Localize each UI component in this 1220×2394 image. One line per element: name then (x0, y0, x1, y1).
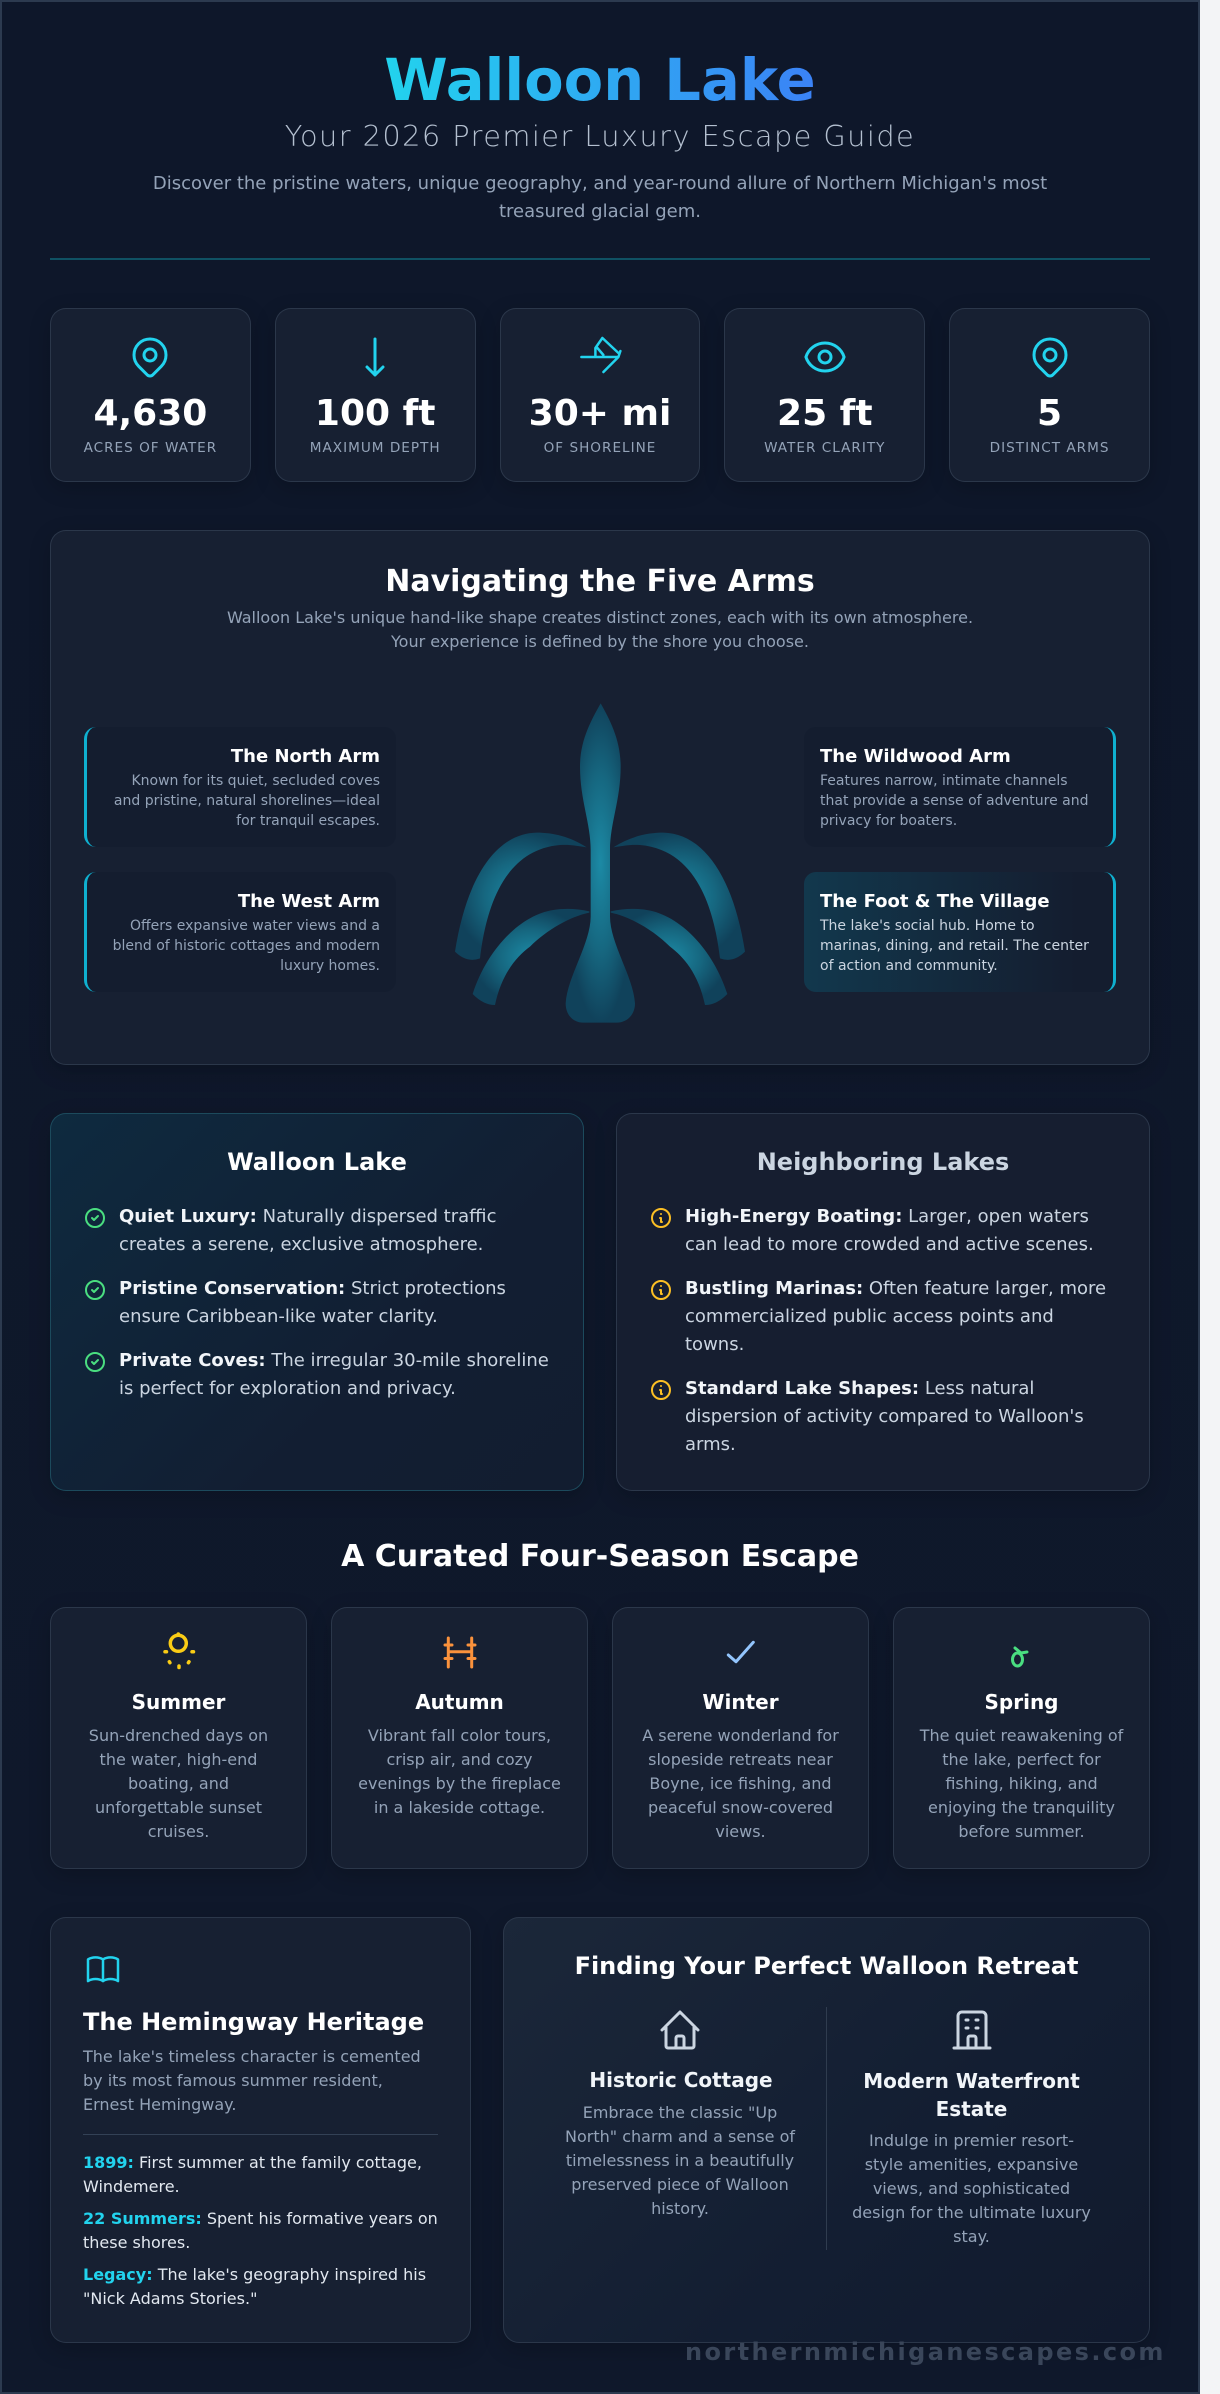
arm: foot and village: The Foot & The Village (820, 891, 1050, 912)
season card: spring: the lake, perfect for (942, 1750, 1101, 1769)
fact: 22 summers: these shores. (83, 2233, 190, 2252)
icon: info (651, 1208, 671, 1228)
arm: foot and village: marinas, dining, and retail. The center (820, 938, 1089, 954)
fact: 1899 (83, 2153, 422, 2196)
arm: wildwood: that provide a sense of adventure and (820, 793, 1088, 809)
option title (863, 2069, 1080, 2121)
stat card: depth (275, 308, 476, 482)
list item: can lead to more crowded and active scenes. (685, 1234, 1094, 1255)
heading: Neighboring Lakes (757, 1148, 1009, 1176)
intro: The lake's timeless character is cemented (83, 2047, 421, 2066)
intro text (153, 173, 1047, 222)
panel: perfect retreat (503, 1917, 1150, 2343)
option text: history. (651, 2199, 709, 2218)
season card: winter: Winter (702, 1690, 779, 1714)
heading: Finding Your Perfect Walloon Retreat (575, 1952, 1078, 1980)
season card: summer (50, 1607, 307, 1869)
icon: info (651, 1380, 671, 1400)
list item (685, 1206, 1094, 1255)
option text: views, and sophisticated (873, 2179, 1070, 2198)
list item (119, 1206, 496, 1255)
fact: legacy: "Nick Adams Stories." (83, 2289, 257, 2308)
option text: stay. (953, 2227, 990, 2246)
option text: Indulge in premier resort- (869, 2131, 1074, 2150)
stat card: arms: DISTINCT ARMS (990, 440, 1109, 456)
stat card: depth: MAXIMUM DEPTH (310, 440, 441, 456)
heading: The Hemingway Heritage (83, 2008, 424, 2036)
option text: design for the ultimate luxury (852, 2203, 1091, 2222)
season card: autumn (331, 1607, 588, 1869)
season card: autumn: crisp air, and cozy (386, 1750, 533, 1769)
icon: info (651, 1280, 671, 1300)
header divider (50, 258, 1150, 260)
list item (685, 1278, 1106, 1355)
subtitle: Your 2026 Premier Luxury Escape Guide (285, 119, 915, 153)
season card: winter: slopeside retreats near (648, 1750, 833, 1769)
intro: by its most famous summer resident, (83, 2071, 383, 2090)
season card: spring: fishing, hiking, and (945, 1774, 1098, 1793)
stat card: clarity: 25 ft (777, 392, 873, 434)
option text: Embrace the classic "Up (583, 2103, 777, 2122)
arm: west: Offers expansive water views and a (130, 918, 380, 934)
list item: is perfect for exploration and privacy. (119, 1378, 456, 1399)
arm: west: blend of historic cottages and modern (113, 938, 380, 954)
season card: winter (612, 1607, 869, 1869)
season card: autumn: in a lakeside cottage. (374, 1798, 545, 1817)
seasons heading: A Curated Four-Season Escape (341, 1539, 859, 1574)
icon: check (85, 1352, 105, 1372)
watermark: northernmichiganescapes.com (685, 2338, 1166, 2366)
arm: north: and pristine, natural shorelines—ideal (114, 793, 380, 809)
season card: autumn: Vibrant fall color tours, (368, 1726, 551, 1745)
fact: 22 summers: 22 Summers: Spent his formative years on (83, 2209, 438, 2228)
list item: creates a serene, exclusive atmosphere. (119, 1234, 483, 1255)
arm: wildwood: Features narrow, intimate channels (820, 773, 1068, 789)
list item: dispersion of activity compared to Walloon's (685, 1406, 1084, 1427)
list item: arms. (685, 1434, 736, 1455)
option text (852, 2131, 1091, 2246)
arm: wildwood: privacy for boaters. (820, 813, 957, 829)
season card: winter: peaceful snow-covered (648, 1798, 833, 1817)
stat card: clarity: WATER CLARITY (764, 440, 885, 456)
season card: winter: A serene wonderland for (642, 1726, 839, 1745)
intro text: Discover the pristine waters, unique geography, and year-round allure of Northern Michigan's most (153, 173, 1047, 194)
season card: spring: before summer. (958, 1822, 1085, 1841)
option title: Estate (936, 2097, 1007, 2121)
panel: Hemingway heritage (50, 1917, 471, 2343)
stat card: shoreline: 30+ mi (529, 392, 671, 434)
season card: spring (893, 1607, 1150, 1869)
arm: west: luxury homes. (280, 958, 380, 974)
fact: 1899: Windemere. (83, 2177, 180, 2196)
stat card: acres (50, 308, 251, 482)
icon: leaves (444, 1636, 476, 1668)
stat card: acres: 4,630 (93, 392, 207, 434)
heading: Walloon Lake (227, 1148, 407, 1176)
season card: summer: unforgettable sunset (95, 1798, 262, 1817)
arm: north (84, 727, 396, 847)
icon: house (660, 2010, 700, 2050)
lake map (455, 704, 745, 1023)
icon: check mark (726, 1640, 755, 1664)
arm: north: for tranquil escapes. (236, 813, 380, 829)
arm: wildwood: The Wildwood Arm (820, 746, 1011, 767)
list item (685, 1378, 1084, 1455)
option text: North" charm and a sense of (565, 2127, 795, 2146)
column divider (826, 2007, 827, 2250)
arm: foot and village: of action and community. (820, 958, 998, 974)
stat card: shoreline (500, 308, 700, 482)
season card: spring: enjoying the tranquility (928, 1798, 1115, 1817)
option title: Historic Cottage (589, 2068, 773, 2092)
season card: spring: Spring (984, 1690, 1058, 1714)
icon: book (86, 1956, 120, 1982)
icon: check (85, 1280, 105, 1300)
section intro: Your experience is defined by the shore you choose. (391, 632, 809, 651)
icon: building (952, 2010, 992, 2050)
panel: five arms (50, 530, 1150, 1065)
list item: Pristine Conservation: Strict protections (119, 1278, 506, 1299)
season card: summer: the water, high-end (100, 1750, 257, 1769)
season card: winter: Boyne, ice fishing, and (649, 1774, 832, 1793)
list item (119, 1350, 549, 1399)
icon: sun (163, 1632, 196, 1670)
heading: Navigating the Five Arms (385, 564, 815, 599)
season card: winter: views. (715, 1822, 766, 1841)
season card: summer: boating, and (128, 1774, 229, 1793)
intro text: treasured glacial gem. (499, 201, 701, 222)
stat card: depth: 100 ft (315, 392, 435, 434)
list item (119, 1278, 506, 1327)
option text: timelessness in a beautifully (566, 2151, 794, 2170)
list item: Quiet Luxury: Naturally dispersed traffic (119, 1206, 496, 1227)
list item: Standard Lake Shapes: Less natural (685, 1378, 1034, 1399)
fact: 1899: 1899: First summer at the family cottage, (83, 2153, 422, 2172)
icon: check (85, 1208, 105, 1228)
divider (83, 2134, 438, 2135)
list item: towns. (685, 1334, 744, 1355)
season card: autumn: evenings by the fireplace (358, 1774, 561, 1793)
list item: commercialized public access points and (685, 1306, 1054, 1327)
stat card: clarity (724, 308, 925, 482)
list item: Bustling Marinas: Often feature larger, more (685, 1278, 1106, 1299)
arm: west: The West Arm (238, 891, 380, 912)
arm: foot and village (804, 872, 1116, 992)
option text: preserved piece of Walloon (571, 2175, 789, 2194)
stat card: arms: 5 (1037, 392, 1062, 434)
option text (565, 2103, 796, 2218)
stat card: acres: ACRES OF WATER (84, 440, 217, 456)
arm: foot and village: The lake's social hub. Home to (820, 918, 1035, 934)
section intro (227, 608, 973, 651)
arm: north: The North Arm (231, 746, 380, 767)
panel: Walloon Lake comparison (50, 1113, 584, 1491)
season card: summer: cruises. (148, 1822, 209, 1841)
stat card: shoreline: OF SHORELINE (544, 440, 656, 456)
season card: autumn: Autumn (415, 1690, 504, 1714)
title: Walloon Lake (384, 47, 816, 114)
fact: legacy: Legacy: The lake's geography inspired his (83, 2265, 426, 2284)
arm: wildwood (804, 727, 1116, 847)
season card: summer: Summer (132, 1690, 225, 1714)
season card: spring: The quiet reawakening of (920, 1726, 1123, 1745)
option text: style amenities, expansive (865, 2155, 1078, 2174)
arm: north: Known for its quiet, secluded coves (131, 773, 380, 789)
list item: Private Coves: The irregular 30-mile shoreline (119, 1350, 549, 1371)
list item: ensure Caribbean-like water clarity. (119, 1306, 438, 1327)
season card: summer: Sun-drenched days on (89, 1726, 268, 1745)
stat card: arms (949, 308, 1150, 482)
intro (82, 2047, 421, 2114)
icon: sprout (1011, 1646, 1028, 1668)
arm: west (84, 872, 396, 992)
intro: Ernest Hemingway. (83, 2095, 236, 2114)
list item: High-Energy Boating: Larger, open waters (685, 1206, 1089, 1227)
fact: 22 summers (83, 2209, 438, 2252)
option title: Modern Waterfront (863, 2069, 1080, 2093)
panel: neighboring lakes comparison (616, 1113, 1150, 1491)
section intro: Walloon Lake's unique hand-like shape creates distinct zones, each with its own atmosphere. (227, 608, 973, 627)
fact: legacy (83, 2265, 426, 2308)
